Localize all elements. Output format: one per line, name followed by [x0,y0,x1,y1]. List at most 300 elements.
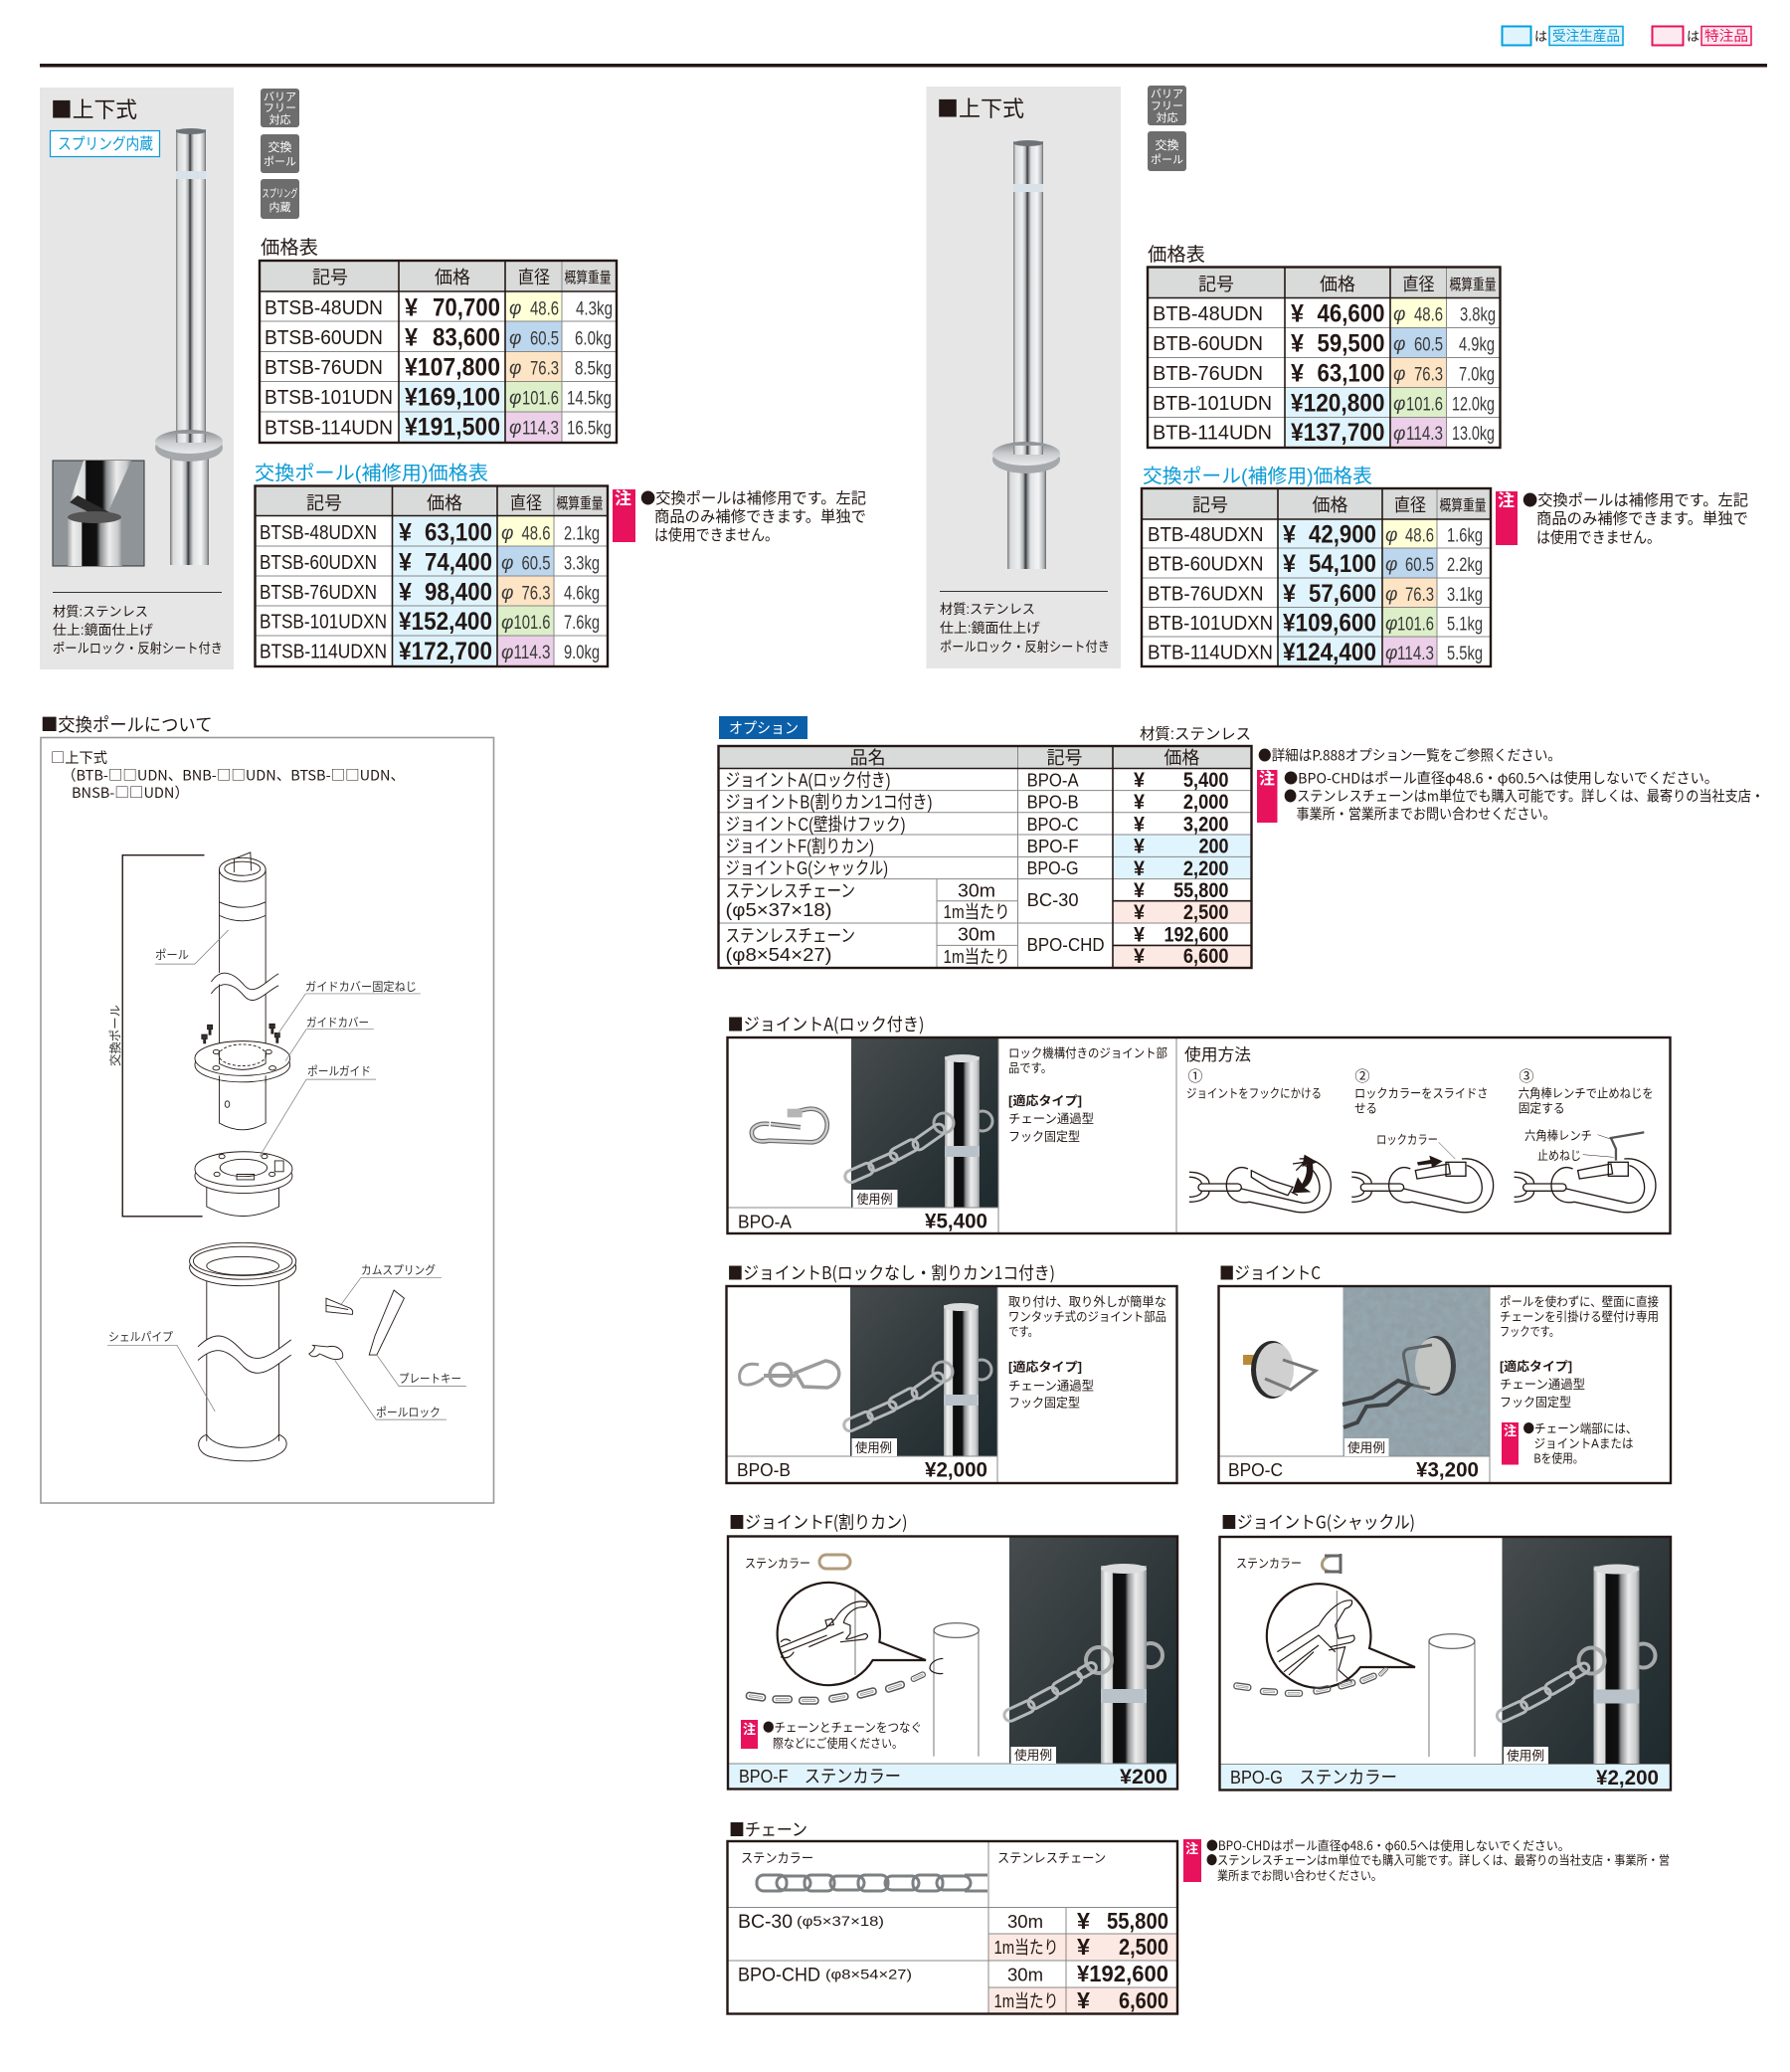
table: BTB replacement: 直径 [1394,495,1426,515]
note F: ●チェーンとチェーンをつなぐ [763,1717,922,1736]
row BTSB-60UDN: φ [509,328,521,349]
row BTB-101UDN: 12.0kg [1452,394,1495,416]
row BTSB-114UDN: φ [509,418,521,439]
row BTSB-48UDN: 70,700 [433,294,500,322]
spec text right: 材質:ステンレス [940,602,1035,617]
chain row BPO-CHD: 30m [1007,1966,1043,1985]
applicable models text [51,747,405,803]
option row chain 5: ¥ [1134,879,1145,902]
row BTSB-76UDXN: 98,400 [425,579,492,607]
notes: options [1257,744,1764,824]
code and price B [737,1458,987,1482]
row BTB-114UDN [1153,419,1495,447]
row BTB-48UDXN: 42,900 [1309,521,1376,549]
row BTB-101UDN: φ [1393,394,1405,415]
row BTB-76UDN: BTB-76UDN [1153,363,1263,385]
usage steps: 固定する [1519,1102,1565,1116]
labels for parts: ガイドカバー固定ねじ [305,980,417,994]
table: options: 品名 [850,748,886,768]
table: BTSB replacement: 価格 [427,493,462,513]
option row F [726,836,1229,857]
row BTB-60UDN: ¥ [1291,330,1304,358]
usage steps: せる [1354,1102,1377,1116]
option row G [726,857,1229,880]
option row F: ジョイントF(割りカン) [726,837,874,856]
row BTSB-60UDN: 6.0kg [575,328,612,350]
option row B: 2,000 [1183,791,1229,814]
description C: フックです。 [1500,1325,1559,1339]
icon: wall hook part [1243,1341,1316,1399]
table: BTB price list: 概算重量 [1450,276,1496,293]
row BTB-101UDXN: BTB-101UDXN [1148,613,1273,635]
row BTSB-48UDXN: ¥ [399,519,412,547]
row BTB-60UDN: 60.5 [1414,334,1443,356]
illustration: F chain and magnifier [746,1583,979,1757]
note: BTSB replacement: ●交換ポールは補修用です。左記 [640,486,866,508]
row BTSB-114UDXN: ¥172,700 [399,638,492,665]
heading: joint B: ■ジョイントB(ロックなし・割りカン1コ付き) [728,1260,1055,1285]
usage tag A: 使用例 [857,1192,893,1207]
table: BTB price list: 記号 [1198,275,1234,294]
heading: 価格表 BTSB: 価格表 [261,237,318,259]
notes: chain: ●BPO-CHDはポール直径φ48.6・φ60.5へは使用しないでください。 [1206,1835,1570,1854]
row BTSB-101UDN: φ [509,388,521,409]
spec text [53,605,223,657]
row BTB-114UDN: BTB-114UDN [1153,422,1272,444]
table: options: 価格 [1164,748,1199,768]
option row chain 8: (φ8×54×27) [726,945,831,965]
option row C: ジョイントC(壁掛けフック) [726,815,905,835]
row BTB-60UDXN: BTB-60UDXN [1148,553,1263,575]
chain image [757,1875,987,1891]
table: BTSB price list: 直径 [518,268,550,287]
row BTSB-60UDXN: 3.3kg [564,553,600,575]
icons: BTB badges [1148,86,1186,171]
description C: フック固定型 [1500,1396,1571,1410]
drawing: step illustrations [1189,1132,1656,1213]
badge: option: オプション [729,720,799,737]
row BTSB-60UDN: 60.5 [530,328,559,350]
chain row BC-30: 1m当たり [994,1938,1058,1958]
material note: 材質:ステンレス [1140,725,1251,743]
option row B: BPO-B [1027,792,1079,812]
table: BTB replacement: 記号 [1192,495,1228,515]
labels for parts: 交換ポール [108,1005,122,1066]
spec text right: ポールロック・反射シート付き [940,640,1110,655]
row BTSB-101UDN: 101.6 [522,388,559,410]
row BTB-76UDXN: 3.1kg [1447,585,1483,606]
spec text right: 仕上:鏡面仕上げ [940,621,1040,636]
row BTSB-60UDN: ¥ [405,324,418,352]
panel: right product BTB [927,87,1121,668]
table: BTB price list [1148,267,1500,448]
row BTB-101UDN: 101.6 [1406,394,1443,416]
usage steps: 六角棒レンチで止めねじを [1519,1086,1654,1100]
option row chain 8: ¥ [1134,923,1145,947]
note: BTB replacement: は使用できません。 [1536,529,1661,547]
icon: shackle G [1322,1554,1341,1574]
row BTB-114UDXN: ¥124,400 [1283,639,1376,666]
row BTB-60UDXN: ¥ [1283,550,1296,578]
row BTSB-114UDXN: φ [501,643,513,663]
row BTSB-76UDN: BTSB-76UDN [265,357,383,379]
row BTB-48UDN: φ [1393,304,1405,325]
row BTSB-76UDN: 76.3 [530,358,559,380]
table: options: 記号 [1046,748,1082,768]
chain row BPO-CHD: 6,600 [1119,1987,1168,2013]
heading: chain: ■チェーン [729,1816,807,1842]
option row C: ¥ [1134,814,1145,836]
description B: フック固定型 [1008,1397,1080,1411]
option row chain 8: 1m当たり [943,947,1010,967]
heading: joint G: ■ジョイントG(シャックル) [1221,1510,1415,1534]
row BTB-114UDN: φ [1393,424,1405,445]
row BTSB-101UDXN: 101.6 [513,613,551,634]
row BTSB-48UDXN [260,519,600,547]
row BTSB-60UDN: 83,600 [433,324,500,352]
pole photo [155,128,223,565]
row BTSB-48UDXN: 63,100 [425,519,492,547]
option row chain 5: ステンレスチェーン [726,881,855,901]
row BTB-101UDN [1153,390,1495,418]
chain labels: ステンカラー [741,1850,813,1866]
row BTSB-48UDN: φ [509,298,521,319]
option row A [726,769,1229,792]
heading: joint A: ■ジョイントA(ロック付き) [728,1012,925,1036]
row BTB-76UDXN: BTB-76UDXN [1148,583,1263,605]
table: BTB replacement: 価格 [1313,495,1348,515]
notes: options: ●BPO-CHDはポール直径φ48.6・φ60.5へは使用しないでください。 [1284,768,1718,788]
applicable models text: □上下式 [51,747,107,768]
option row chain 5: 55,800 [1173,879,1229,902]
row BTB-60UDN: BTB-60UDN [1153,333,1263,355]
panel: joint G [1219,1536,1671,1790]
chain row BC-30: ¥ [1077,1908,1090,1934]
usage tag F: 使用例 [1014,1748,1052,1763]
table: BTSB replacement [255,485,608,666]
labels for parts: ポールガイド [307,1064,371,1078]
note C: ●チェーン端部には、 [1523,1418,1637,1436]
row BTB-48UDN [1153,300,1496,328]
row BTSB-76UDXN: 76.3 [521,583,551,605]
row BTB-48UDXN: BTB-48UDXN [1148,524,1263,546]
option row chain 8 [726,923,1229,968]
note C: ジョイントAまたは [1533,1436,1633,1450]
note: BTB replacement: ●交換ポールは補修用です。左記 [1522,488,1748,510]
code and price F [739,1766,1167,1789]
chain row BC-30: (φ5×37×18) [797,1913,884,1929]
description A: ロック機構付きのジョイント部 [1008,1046,1167,1060]
chain row BPO-CHD: ¥192,600 [1077,1961,1168,1986]
heading: 上下式 right: ■上下式 [937,92,1024,123]
row BTB-76UDXN: 76.3 [1405,585,1434,606]
photo: wall hook [1342,1286,1490,1456]
row BTB-114UDN: ¥137,700 [1291,419,1384,447]
illustration: G chain and magnifier [1233,1584,1475,1757]
row BTB-101UDXN: 101.6 [1397,615,1434,635]
notes: chain: 業所までお問い合わせください。 [1217,1868,1382,1883]
notes: options: ●詳細はP.888オプション一覧をご参照ください。 [1258,744,1561,766]
panel: joint C [1218,1286,1671,1483]
usage steps: ② [1354,1065,1370,1086]
row BTSB-60UDXN: BTSB-60UDXN [260,552,377,574]
icons: BTB badges: バリア [1151,88,1183,100]
labels for parts: ポール [155,948,189,962]
panel: exploded diagram [41,738,493,1503]
detail photo [53,461,144,566]
note: BTB replacement: 注 [1498,491,1515,510]
icons: BTSB badges: バリア [264,91,296,103]
row BTSB-48UDN: 4.3kg [576,298,613,320]
chain row BPO-CHD: 1m当たり [994,1991,1058,2011]
legend: order-made and special-order keys: は [1534,29,1547,44]
labels for parts: シェルパイプ [108,1330,173,1344]
option row B [726,791,1229,814]
row BTSB-101UDN: BTSB-101UDN [265,387,393,409]
option row chain 8: ¥ [1134,945,1145,968]
option row chain 5: BC-30 [1027,890,1079,910]
heading: joint F: ■ジョイントF(割りカン) [729,1510,907,1534]
code and price F: BPO-F ステンカラー [739,1767,901,1787]
description A: 品です。 [1008,1061,1052,1075]
row BTSB-114UDN [265,414,612,442]
icon: carabiner part [752,1109,827,1142]
row BTSB-76UDN: ¥107,800 [405,354,500,382]
row BTSB-114UDXN: 114.3 [513,643,551,663]
description B: 取り付け、取り外しが簡単な [1008,1294,1166,1309]
notes: chain: ●ステンレスチェーンはm単位でも購入可能です。詳しくは、最寄りの当社支店・事業所・営 [1206,1850,1670,1868]
row BTSB-48UDXN: φ [501,523,513,544]
table: BTSB replacement: 直径 [510,493,542,513]
notes: chain: 注 [1185,1841,1198,1856]
spec text: ポールロック・反射シート付き [53,641,223,657]
row BTB-60UDXN [1148,550,1483,578]
row BTSB-76UDXN: φ [501,583,513,604]
icons: BTSB badges: ポール [264,155,296,168]
row BTB-60UDN [1153,330,1495,358]
applicable models text: BNSB-□□UDN） [72,782,189,803]
row BTB-76UDN [1153,360,1495,388]
heading: 上下式: ■上下式 [51,93,137,124]
applicable models text: （BTB-□□UDN、BNB-□□UDN、BTSB-□□UDN、 [62,764,405,786]
labels for parts: カムスプリング [361,1263,436,1277]
usage steps: ① [1187,1065,1203,1086]
usage steps: 使用方法 [1184,1045,1251,1064]
option row chain 8: 6,600 [1183,945,1229,968]
description C: ポールを使わずに、壁面に直接 [1500,1294,1659,1309]
code and price C: ¥3,200 [1416,1458,1479,1482]
code and price C: BPO-C [1228,1460,1283,1480]
option row chain 8: 192,600 [1164,923,1229,947]
labels for parts: プレートキー [399,1372,461,1386]
legend: order-made and special-order keys: 特注品 [1704,28,1748,44]
icons: BTSB badges: 交換 [268,140,292,154]
row BTB-114UDXN: 5.5kg [1447,644,1483,664]
heading: replacement pole price BTB: 交換ポール(補修用)価格表 [1143,466,1372,487]
icons: BTSB badges: フリー [264,102,296,114]
chain row BC-30: ¥ [1077,1934,1090,1960]
option row chain 5 [726,879,1229,924]
code and price G [1230,1767,1659,1789]
option row chain 5: 30m [958,881,995,901]
option row A: 5,400 [1183,769,1229,792]
description C [1500,1294,1659,1410]
row BTB-76UDXN [1148,580,1483,608]
row BTB-101UDXN: φ [1385,614,1397,635]
option row B: ジョイントB(割りカン1コ付き) [726,792,933,812]
row BTB-114UDN: 114.3 [1406,424,1443,445]
spec text right [940,602,1110,655]
code and price B: BPO-B [737,1460,791,1480]
option row C: BPO-C [1027,815,1079,835]
code and price A: ¥5,400 [925,1210,987,1233]
spec text: 材質:ステンレス [53,605,148,619]
row BTB-76UDN: 63,100 [1317,360,1384,388]
notes: options: 注 [1259,770,1275,788]
row BTB-76UDXN: 57,600 [1309,580,1376,608]
row BTSB-76UDN: φ [509,358,521,379]
row BTB-48UDN: BTB-48UDN [1153,303,1263,325]
option row F: ¥ [1134,836,1145,857]
code and price G: ¥2,200 [1596,1767,1659,1789]
chain row BPO-CHD: ¥ [1077,1987,1090,2013]
table: BTB replacement: 概算重量 [1440,496,1486,514]
option row A: ジョイントA(ロック付き) [726,770,891,790]
description B: チェーン通過型 [1008,1379,1094,1393]
row BTSB-101UDN: ¥169,100 [405,384,500,412]
row BTSB-60UDXN: 74,400 [425,549,492,577]
row BTSB-48UDXN: 48.6 [521,523,551,545]
usage steps: ロックカラーをスライドさ [1354,1086,1488,1100]
option row C [726,814,1229,836]
option row G: ¥ [1134,857,1145,880]
code and price C [1228,1458,1479,1482]
description B: [適応タイプ] [1008,1359,1082,1375]
code and price F: ¥200 [1120,1766,1167,1789]
tag: spring: スプリング内蔵 [58,135,153,153]
heading: 価格表 BTB: 価格表 [1148,244,1205,266]
row BTSB-101UDXN [260,608,600,636]
table: BTSB replacement: 記号 [306,493,342,513]
row BTSB-101UDN: 14.5kg [567,388,612,410]
row BTSB-76UDN [265,354,612,382]
description A [1008,1046,1167,1144]
note F: 際などにご使用ください。 [773,1736,903,1751]
icons: BTB badges: ポール [1151,153,1183,166]
note C: Bを使用。 [1533,1450,1583,1466]
option row C: 3,200 [1183,814,1229,836]
row BTSB-76UDXN [260,579,600,607]
chain row BC-30 [738,1908,1168,1960]
table: BTSB price list [260,261,617,443]
icons: BTB badges: 対応 [1156,111,1177,124]
row BTSB-101UDN [265,384,612,412]
row BTSB-48UDN: 48.6 [530,298,559,320]
row BTSB-76UDXN: 4.6kg [564,583,600,605]
usage tag C: 使用例 [1347,1440,1385,1455]
panel: joint A [727,1037,1671,1233]
row BTSB-114UDN: ¥191,500 [405,414,500,442]
row BTB-48UDXN: 1.6kg [1447,525,1483,547]
row BTB-48UDXN: 48.6 [1405,525,1434,547]
row BTB-76UDN: ¥ [1291,360,1304,388]
legend: order-made and special-order keys: は [1687,29,1700,44]
option row chain 5: (φ5×37×18) [726,900,831,920]
usage steps: ③ [1519,1065,1534,1086]
spec text: 仕上:鏡面仕上げ [53,623,153,638]
code and price G: BPO-G ステンカラー [1230,1768,1397,1788]
icons: BTSB badges: 内蔵 [268,200,290,214]
row BTB-76UDN: 7.0kg [1459,364,1495,386]
row BTSB-101UDXN: ¥152,400 [399,608,492,636]
photo: joint A usage [843,1037,998,1208]
table: BTSB price list: 価格 [435,268,470,287]
table: BTB replacement [1142,488,1491,666]
row BTB-76UDXN: ¥ [1283,580,1296,608]
description B [1008,1294,1166,1411]
row BTSB-48UDN: BTSB-48UDN [265,297,383,319]
row BTSB-114UDN: BTSB-114UDN [265,418,393,440]
note C [1502,1418,1637,1466]
row BTB-114UDXN: 114.3 [1397,644,1434,664]
row BTB-76UDXN: φ [1385,585,1397,605]
row BTSB-76UDXN: BTSB-76UDXN [260,582,377,604]
row BTSB-114UDXN: 9.0kg [564,643,600,663]
table: BTB price list: 価格 [1320,275,1355,294]
row BTB-101UDN: ¥120,800 [1291,390,1384,418]
notes: chain [1183,1835,1670,1883]
notes: options: 事業所・営業所までお問い合わせください。 [1297,806,1555,824]
option row chain 8: ステンレスチェーン [726,926,855,946]
description A: [適応タイプ] [1008,1093,1082,1108]
row BTB-48UDN: 46,600 [1317,300,1384,328]
row BTB-60UDN: φ [1393,334,1405,355]
chain row BC-30: 55,800 [1107,1908,1168,1934]
row BTB-101UDXN: ¥109,600 [1283,609,1376,637]
row BTSB-114UDN: 16.5kg [567,418,612,440]
option row chain 5: 1m当たり [943,902,1010,922]
option row chain 5: ¥ [1134,901,1145,924]
option row chain 5: 2,500 [1183,901,1229,924]
table: BTB price list: 直径 [1402,275,1434,294]
note: BTSB replacement: は使用できません。 [654,526,779,544]
chain row BC-30: 2,500 [1119,1934,1168,1960]
table: options [718,746,1251,968]
row BTB-48UDXN: φ [1385,525,1397,546]
pole photo right [992,140,1060,569]
usage steps [1184,1045,1656,1213]
description A: フック固定型 [1008,1130,1080,1144]
row BTSB-114UDXN [260,638,600,665]
description C: チェーンを引掛ける壁付け専用 [1500,1309,1659,1324]
icons: BTSB badges: スプリング [263,186,298,200]
icons: BTB badges: フリー [1151,100,1183,112]
note: BTB replacement [1496,488,1748,547]
chain row BC-30: 30m [1007,1912,1043,1932]
table: BTSB price list: 概算重量 [565,269,611,286]
note F [741,1717,922,1751]
legend: order-made and special-order keys [1502,26,1751,46]
table: BTSB price list: 記号 [312,268,348,287]
row BTB-60UDXN: φ [1385,555,1397,575]
row BTB-60UDXN: 2.2kg [1447,555,1483,576]
usage steps: ロックカラー [1376,1133,1438,1147]
row BTB-76UDN: 76.3 [1414,364,1443,386]
top rule [40,64,1767,68]
heading: joint C: ■ジョイントC [1219,1260,1321,1285]
usage steps: 止めねじ [1537,1149,1581,1163]
panel: joint F [728,1536,1177,1789]
